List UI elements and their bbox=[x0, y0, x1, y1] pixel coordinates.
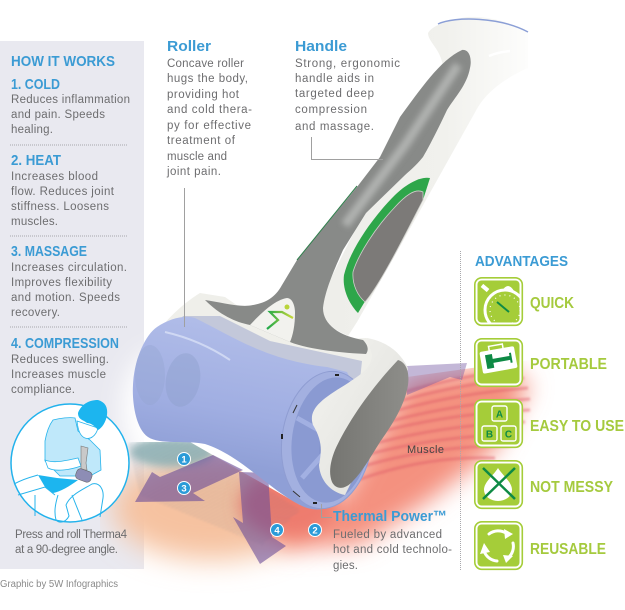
icon: recycle arrows bbox=[475, 522, 522, 569]
caption: press and roll: at a 90-degree angle. bbox=[15, 544, 118, 556]
number badge 2 bbox=[308, 524, 322, 536]
green grip insert bbox=[344, 178, 430, 313]
icon: abc blocks: B bbox=[486, 430, 493, 440]
text block: massage: Increases circulation. bbox=[11, 262, 127, 274]
text block: cold: 1. COLD bbox=[11, 76, 60, 93]
callout: thermal power: hot and cold technolo- bbox=[333, 544, 452, 556]
text block: massage: and motion. Speeds bbox=[11, 292, 120, 304]
text block: roller description: hugs the body, bbox=[167, 73, 248, 85]
heading: handle: Handle bbox=[295, 38, 347, 55]
text block: roller description: and cold thera- bbox=[167, 104, 252, 116]
text block: compression bbox=[11, 335, 119, 396]
text block: heat: 2. HEAT bbox=[11, 152, 61, 169]
icon: abc blocks: A bbox=[496, 410, 503, 420]
text block: cold: Reduces inflammation bbox=[11, 94, 130, 106]
roller end rim bbox=[273, 365, 381, 515]
device: Therma4 roller bbox=[133, 17, 528, 515]
panel: how it works bbox=[0, 41, 204, 580]
grey end cap bbox=[330, 360, 408, 488]
logo pocket bbox=[250, 298, 295, 342]
number badge 2: 2 bbox=[312, 526, 318, 536]
icon: abc blocks: C bbox=[505, 430, 512, 440]
label: quick: QUICK bbox=[530, 295, 574, 312]
credit: Graphic by 5W Infographics bbox=[0, 579, 118, 590]
forearm bbox=[45, 458, 81, 470]
text block: roller description: treatment of bbox=[167, 135, 236, 147]
icon: abc blocks bbox=[475, 400, 522, 447]
text block: handle description: Strong, ergonomic bbox=[295, 58, 400, 70]
text block: compression: 4. COMPRESSION bbox=[11, 335, 119, 352]
arrow: 3 left bbox=[135, 455, 243, 502]
icon: briefcase bbox=[475, 339, 522, 386]
text block: roller description: Concave roller bbox=[167, 58, 244, 70]
text block: cold: and pain. Speeds bbox=[11, 109, 105, 121]
icon: no-mess drop bbox=[475, 461, 522, 508]
label: portable: PORTABLE bbox=[530, 356, 607, 373]
arrow: 4 down bbox=[233, 472, 286, 564]
arrow: right flow bbox=[407, 363, 467, 395]
label: muscle: Muscle bbox=[407, 444, 444, 456]
heading: roller bbox=[166, 38, 252, 178]
text block: heat bbox=[11, 152, 115, 228]
legs bbox=[14, 475, 103, 522]
text block: roller description: providing hot bbox=[167, 89, 240, 101]
mini device bbox=[74, 446, 93, 483]
heading: roller: Roller bbox=[167, 38, 211, 55]
muscle graphic bbox=[112, 365, 530, 560]
number badge 4: 4 bbox=[274, 526, 280, 536]
number badge 1 bbox=[178, 452, 190, 466]
number badge 3 bbox=[178, 482, 190, 494]
text block: massage bbox=[11, 243, 127, 319]
callout: thermal power: Thermal Power™ bbox=[333, 508, 447, 525]
shorts bbox=[38, 475, 78, 493]
front cap frame bbox=[312, 338, 408, 495]
text block: handle description: compression bbox=[295, 104, 367, 116]
caption: press and roll: Press and roll Therma4 bbox=[15, 529, 128, 541]
text block: heat: stiffness. Loosens bbox=[11, 201, 109, 213]
face bbox=[77, 421, 98, 439]
text block: compression: compliance. bbox=[11, 384, 75, 396]
text block: massage: 3. MASSAGE bbox=[11, 243, 87, 260]
head frame bbox=[133, 293, 408, 420]
text block: cold: healing. bbox=[11, 124, 53, 136]
label: not messy: NOT MESSY bbox=[530, 479, 613, 496]
heading: advantages: ADVANTAGES bbox=[475, 253, 568, 270]
text block: heat: Increases blood bbox=[11, 171, 98, 183]
caption: press and roll bbox=[15, 529, 128, 556]
text block: heat: flow. Reduces joint bbox=[11, 186, 115, 198]
heading: handle bbox=[295, 38, 400, 133]
roller body bbox=[133, 317, 353, 510]
handle body bbox=[322, 17, 528, 336]
panel: advantages bbox=[475, 253, 624, 569]
icon: stopwatch bbox=[475, 278, 525, 330]
text block: cold bbox=[11, 76, 130, 136]
text block: massage: recovery. bbox=[11, 307, 60, 319]
callout: thermal power: Fueled by advanced bbox=[333, 529, 442, 541]
illustration: man using roller bbox=[11, 400, 129, 522]
hair bbox=[78, 400, 107, 430]
grey handle grip bbox=[205, 50, 471, 354]
shirt bbox=[45, 418, 101, 476]
number badge 1: 1 bbox=[181, 454, 187, 466]
number badge 3: 3 bbox=[181, 484, 187, 494]
callout: thermal power bbox=[322, 504, 452, 572]
heading: how it works: HOW IT WORKS bbox=[11, 53, 115, 70]
text block: roller description: py for effective bbox=[167, 120, 251, 132]
text block: compression: Reduces swelling. bbox=[11, 354, 109, 366]
number badge 4 bbox=[270, 524, 284, 536]
text block: roller description: joint pain. bbox=[166, 166, 221, 178]
text block: heat: muscles. bbox=[11, 216, 58, 228]
text block: handle description: and massage. bbox=[295, 121, 374, 133]
text block: handle description: handle aids in bbox=[295, 73, 374, 85]
callout: thermal power: gies. bbox=[333, 560, 358, 572]
text block: handle description bbox=[295, 58, 400, 133]
label: reusable: REUSABLE bbox=[530, 541, 606, 558]
text block: compression: Increases muscle bbox=[11, 369, 106, 381]
text block: roller description bbox=[166, 58, 252, 178]
text block: massage: Improves flexibility bbox=[11, 277, 112, 289]
text block: handle description: targeted deep bbox=[295, 88, 374, 100]
text block: roller description: muscle and bbox=[167, 151, 227, 163]
